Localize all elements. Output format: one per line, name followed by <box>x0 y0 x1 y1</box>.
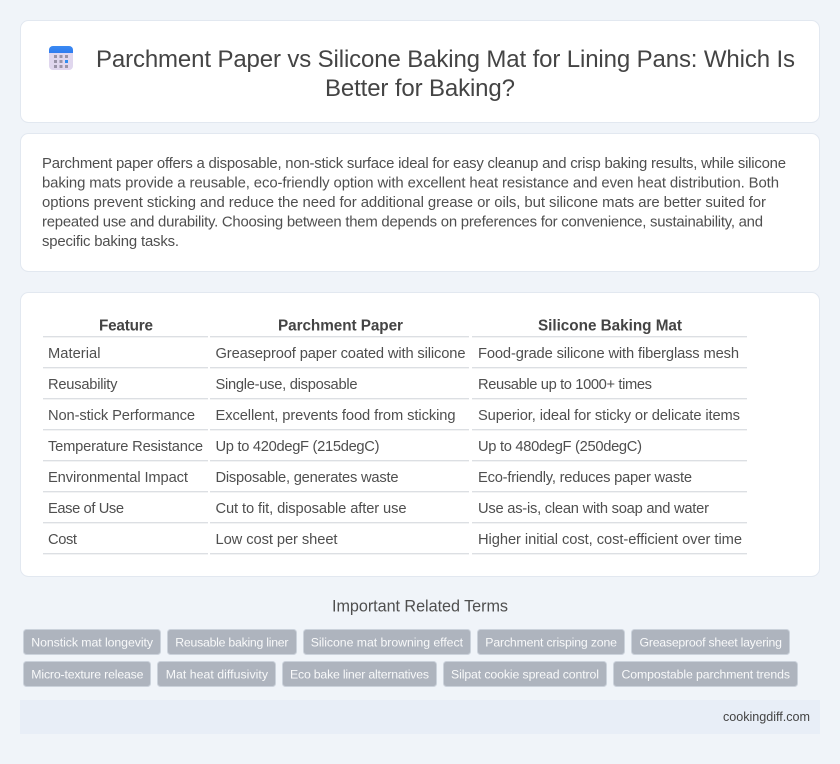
tag <box>304 630 470 654</box>
row: reusability: Reusable up to 1000+ times <box>478 377 652 393</box>
table header: Parchment Paper <box>278 318 403 334</box>
row: material: Food-grade silicone with fiberglass mesh <box>478 346 739 362</box>
tag <box>282 662 436 686</box>
tag: Parchment crisping zone <box>485 636 617 650</box>
tags: related terms <box>24 630 798 686</box>
row: temperature resistance: Up to 480degF (250degC) <box>478 439 642 455</box>
row: environmental impact: Disposable, generates waste <box>216 470 398 486</box>
panel: summary text: repeated use and durability. Choosing between them depends on preferences for convenience, sustainability, and <box>42 214 763 230</box>
row: temperature resistance: Up to 420degF (215degC) <box>216 439 380 455</box>
panel: comparison table <box>20 292 820 576</box>
row: cost: Low cost per sheet <box>216 532 338 548</box>
footer: cookingdiff.com <box>723 710 810 724</box>
row: ease of use: Use as-is, clean with soap and water <box>478 501 709 517</box>
row: cost: Higher initial cost, cost-efficient over time <box>478 532 742 548</box>
row: environmental impact: Eco-friendly, reduces paper waste <box>478 470 692 486</box>
icon: calendar <box>49 46 73 70</box>
title <box>96 46 795 102</box>
row: environmental impact <box>48 470 692 486</box>
row: reusability: Reusability <box>48 377 118 393</box>
tag <box>158 662 276 686</box>
row: ease of use <box>48 501 709 517</box>
tag <box>168 630 296 654</box>
panel: summary text <box>20 134 820 272</box>
tag <box>478 630 624 654</box>
row: reusability: Single-use, disposable <box>216 377 358 393</box>
tag: Greaseproof sheet layering <box>640 636 782 650</box>
row: material: Greaseproof paper coated with silicone <box>216 346 466 362</box>
row: temperature resistance: Temperature Resistance <box>48 439 203 455</box>
row: cost <box>48 532 742 548</box>
row: ease of use: Ease of Use <box>48 501 124 517</box>
panel: summary text: specific baking tasks. <box>42 234 179 250</box>
row: non-stick performance <box>48 408 740 424</box>
row: reusability <box>48 377 652 393</box>
row: ease of use: Cut to fit, disposable after use <box>216 501 406 517</box>
table header: Silicone Baking Mat <box>538 318 682 334</box>
tag <box>444 662 606 686</box>
title: Better for Baking? <box>325 75 515 102</box>
tag <box>614 662 798 686</box>
row: non-stick performance: Excellent, prevents food from sticking <box>216 408 456 424</box>
row: material: Material <box>48 346 100 362</box>
table header <box>99 318 682 334</box>
tag: Micro-texture release <box>31 668 144 682</box>
tag: Nonstick mat longevity <box>31 636 154 650</box>
table header: Feature <box>99 318 153 334</box>
footer <box>20 700 820 734</box>
tag: Eco bake liner alternatives <box>290 668 429 682</box>
title: Parchment Paper vs Silicone Baking Mat for Lining Pans: Which Is <box>96 46 795 73</box>
panel: title card <box>20 20 820 122</box>
tag: Mat heat diffusivity <box>166 668 269 682</box>
tag <box>632 630 790 654</box>
panel: summary text: options prevent sticking and reduce the need for additional grease or oils, but silicone mats are better suited for <box>42 195 766 211</box>
tag: Compostable parchment trends <box>622 668 790 682</box>
panel: summary text: Parchment paper offers a disposable, non-stick surface ideal for easy cleanup and crisp baking results, while silicone <box>42 156 786 172</box>
row: cost: Cost <box>48 532 77 548</box>
row: environmental impact: Environmental Impact <box>48 470 188 486</box>
panel: summary text: baking mats provide a reusable, eco-friendly option with excellent heat resistance and even heat distribution. Both <box>42 176 779 192</box>
tag <box>24 662 150 686</box>
row: material <box>48 346 739 362</box>
heading: important related terms: Important Related Terms <box>332 598 508 616</box>
tag <box>24 630 160 654</box>
row: non-stick performance: Non-stick Performance <box>48 408 195 424</box>
tag: Silpat cookie spread control <box>451 668 599 682</box>
tag: Silicone mat browning effect <box>311 636 464 650</box>
row: non-stick performance: Superior, ideal for sticky or delicate items <box>478 408 740 424</box>
row: temperature resistance <box>48 439 642 455</box>
tag: Reusable baking liner <box>175 636 288 650</box>
